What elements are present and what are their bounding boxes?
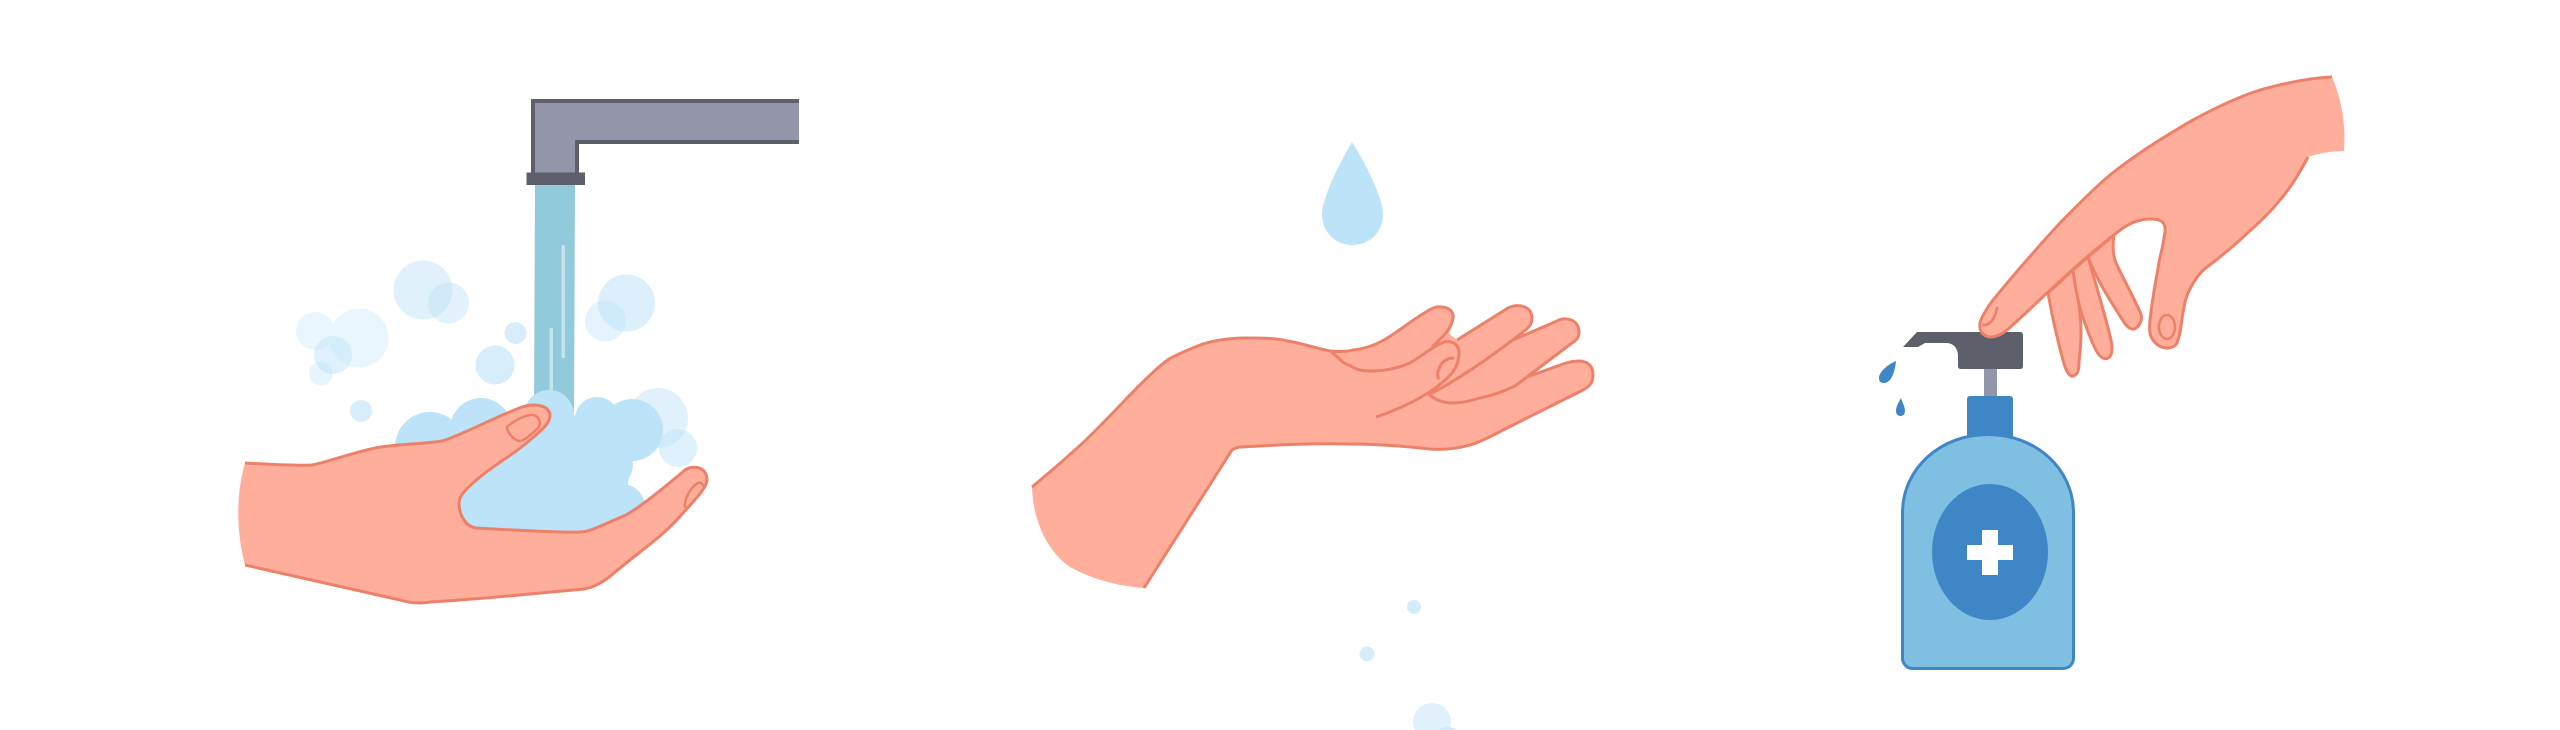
soap foam (395, 390, 663, 540)
icon: sanitizer bottle (1902, 434, 2074, 668)
icon: bottle neck (1967, 396, 2013, 441)
panel: hand pressing sanitizer pump (1879, 77, 2344, 668)
bottle label (1932, 484, 2048, 620)
icon: pump stem (1984, 365, 1997, 400)
panel: open palm with falling drops (1032, 142, 1593, 730)
falling droplets (1360, 600, 1461, 730)
icon: open hand (1032, 306, 1593, 588)
icon: medical cross (1967, 530, 2013, 575)
icon: fingers behind the hand (2048, 235, 2141, 376)
icon: cupped hand (238, 405, 707, 603)
floating soap bubbles (296, 260, 697, 467)
icon: water drop (1322, 142, 1383, 245)
icon: faucet (526, 101, 799, 185)
icon: pump head (1903, 332, 2023, 369)
icon: pressing hand (1980, 77, 2344, 348)
icon: soap drops (1879, 361, 1905, 416)
panel: washing hands under a tap (238, 101, 799, 603)
icon: water stream (534, 184, 575, 412)
